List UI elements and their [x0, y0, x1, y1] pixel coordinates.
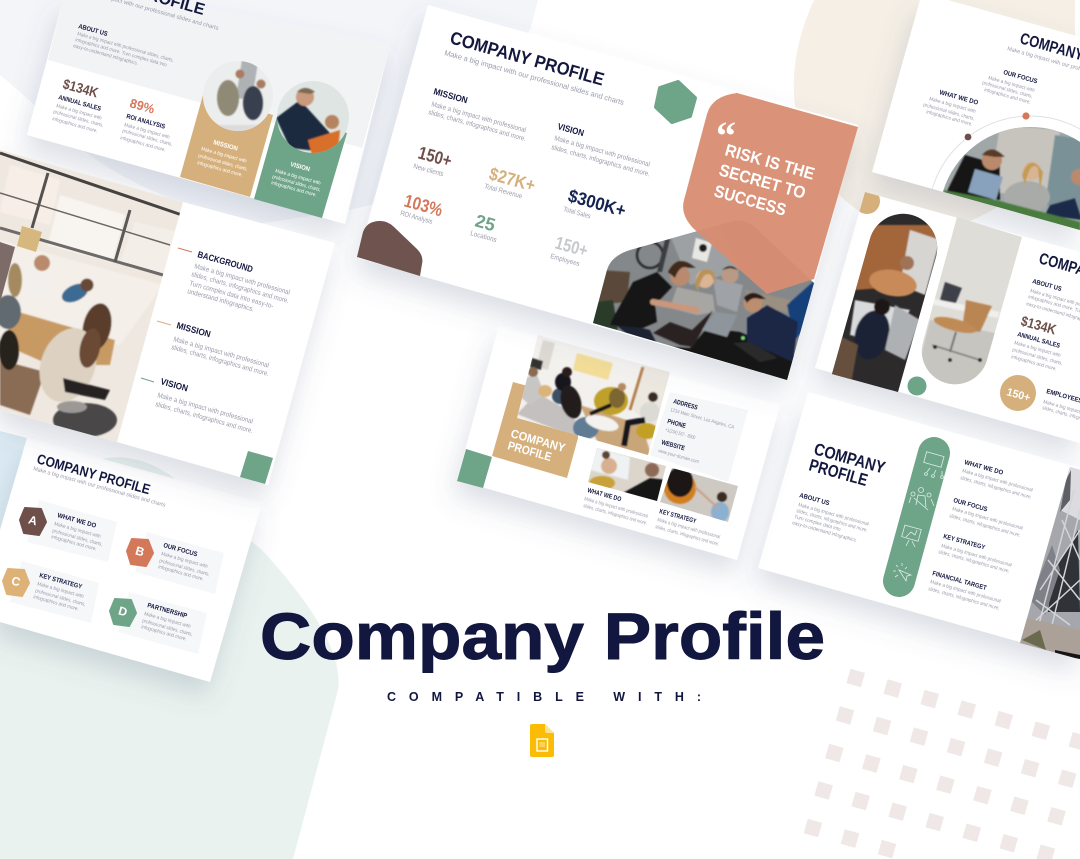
- hexagon A: [20, 508, 46, 535]
- vision heading: VISION: [556, 121, 585, 138]
- text: infographics and more.: [157, 564, 204, 583]
- about us text: easy-to-understand infographics.: [791, 520, 858, 544]
- key strategy heading: KEY STRATEGY: [942, 533, 986, 552]
- left brown block: [0, 242, 15, 303]
- annual sales text: Make a big impact with: [55, 103, 103, 122]
- vision heading: VISION: [159, 376, 189, 393]
- what we do text: Make a big impact with professional: [961, 468, 1033, 494]
- text: [50, 521, 103, 553]
- text: Make a big impact with: [53, 521, 102, 540]
- stat: roi: 89%: [128, 95, 157, 117]
- letter D: D: [117, 604, 129, 619]
- stat: employees: Employees: [549, 253, 581, 268]
- key strategy text: Make a big impact with professional: [940, 543, 1012, 569]
- green square: [240, 451, 273, 484]
- green octagon: [656, 82, 695, 122]
- icon: google slides: [530, 724, 554, 757]
- heading line one: COMPANY: [812, 440, 888, 478]
- vision text: [270, 168, 322, 199]
- building photo: [1020, 467, 1080, 659]
- vision text: slides, charts, infographics and more.: [550, 144, 651, 178]
- tan block heading: COMPANY: [509, 426, 567, 455]
- quote text: [712, 141, 817, 220]
- what we do text: Make a big impact with professional: [583, 496, 649, 520]
- text: [140, 611, 193, 643]
- brown blob: [357, 221, 422, 276]
- photo: hair stylist: [660, 468, 738, 522]
- quote text: SUCCESS: [712, 182, 788, 220]
- heading: WHAT WE DO: [56, 512, 97, 530]
- letter B: B: [134, 544, 146, 559]
- what we do text: slides, charts, infographics and more.: [582, 503, 648, 527]
- about us text: slides, charts, infographics and more.: [795, 508, 868, 534]
- icon: folder network: [924, 452, 944, 478]
- green dot: [908, 376, 926, 396]
- address heading: ADDRESS: [672, 398, 699, 412]
- annual sales text: infographics and more.: [51, 116, 98, 135]
- brown dot: [965, 134, 971, 140]
- text: Make a big impact with: [160, 551, 209, 570]
- heading: PARTNERSHIP: [146, 602, 188, 620]
- background: beige shape: [794, 0, 1075, 221]
- mission text: [196, 146, 248, 179]
- about us text: [791, 502, 869, 544]
- slide: main company profile: [357, 5, 858, 385]
- card D: [110, 592, 207, 654]
- mission panel: [180, 95, 273, 197]
- phone: +1(234) 567 - 8900: [664, 427, 696, 441]
- subtitle: Make a big impact with our professional slides and charts: [443, 48, 625, 107]
- vision text: Make a big impact with professional: [553, 135, 651, 169]
- key strategy text: slides, charts, infographics and more.: [654, 524, 720, 548]
- accent line: background: [178, 248, 192, 252]
- arch photo: office chair: [922, 218, 1022, 384]
- stat: total revenue: Total Revenue: [483, 183, 523, 200]
- about us text: Turn complex data into: [793, 514, 841, 533]
- about us text: Make a big impact with professional slides, charts,: [76, 31, 174, 64]
- photo: woman in profile: [588, 448, 666, 501]
- roi heading: ROI ANALYSIS: [125, 113, 166, 131]
- stat: new clients: 150+: [416, 143, 454, 171]
- annual sales text: Make a big impact with: [1013, 340, 1062, 359]
- our focus heading: OUR FOCUS: [1002, 69, 1039, 85]
- grey contact panel: [650, 392, 748, 482]
- mission heading: MISSION: [175, 320, 212, 339]
- quote mark: “: [716, 113, 736, 158]
- key strategy text: slides, charts, infographics and more.: [937, 549, 1010, 575]
- what we do heading: WHAT WE DO: [963, 459, 1004, 477]
- what we do text: Make a big impact with: [928, 96, 977, 115]
- slide card: [0, 150, 335, 485]
- text: infographics and more.: [50, 534, 97, 553]
- background heading: BACKGROUND: [196, 249, 254, 274]
- quote panel: [683, 93, 858, 294]
- annual sales text: [1010, 340, 1063, 373]
- about us text: infographics and more. Turn complex data into: [74, 37, 168, 69]
- tan square: [17, 226, 42, 252]
- vision panel: [254, 113, 347, 218]
- what we do text: professional slides, charts,: [922, 102, 975, 122]
- financial target text: Make a big impact with professional: [929, 579, 1001, 605]
- background text: understand infographics.: [186, 288, 255, 313]
- heading: KEY STRATEGY: [38, 572, 83, 591]
- address: 1234 Main Street, Los Angeles, CA: [669, 407, 735, 431]
- about us text: easy-to-understand infographics.: [72, 43, 139, 67]
- financial target heading: FINANCIAL TARGET: [931, 570, 987, 592]
- mission heading: MISSION: [212, 139, 239, 153]
- stat: new clients: [412, 143, 454, 178]
- slide card: [358, 5, 858, 380]
- about us text: Make a big impact with professional: [797, 502, 869, 528]
- slide card: [27, 0, 390, 224]
- our focus text: Make a big impact with: [987, 75, 1036, 94]
- our focus text: professional slides, charts,: [981, 80, 1033, 100]
- grey header panel: [48, 0, 390, 148]
- what we do text: [922, 96, 977, 128]
- icon: click cursor: [893, 563, 911, 581]
- mission text: slides, charts, infographics and more.: [427, 109, 527, 143]
- green square: [457, 449, 492, 488]
- vision photo: [277, 81, 349, 153]
- annual sales text: professional slides, charts,: [52, 109, 104, 129]
- mission heading: MISSION: [432, 86, 469, 105]
- stat: employees: 150+: [553, 233, 590, 261]
- mission text: infographics and more.: [196, 160, 243, 179]
- green pill: [899, 453, 934, 581]
- employees badge: [1000, 375, 1036, 411]
- about us heading: ABOUT US: [1031, 278, 1063, 293]
- background text: [186, 263, 291, 313]
- letter A: A: [27, 513, 39, 528]
- tan block: [492, 382, 578, 478]
- what we do heading: WHAT WE DO: [938, 89, 979, 107]
- sky photo strip left of lower slide: [0, 431, 27, 532]
- text: Make a big impact with: [143, 611, 192, 630]
- slide card: [872, 0, 1080, 230]
- stat: total sales: Total Sales: [562, 206, 592, 221]
- annual sales text: [51, 103, 104, 135]
- website heading: WEBSITE: [660, 439, 686, 453]
- text: infographics and more.: [32, 594, 79, 613]
- vision text: professional slides, charts,: [271, 174, 321, 193]
- annual sales text: professional slides, charts,: [1011, 347, 1063, 367]
- employees badge: 150+: [1005, 386, 1032, 404]
- key strategy heading: KEY STRATEGY: [658, 508, 697, 525]
- mission photo: [203, 61, 268, 131]
- card C: [3, 561, 99, 623]
- heading line two: PROFILE: [807, 456, 870, 490]
- meeting photo: [517, 335, 670, 455]
- text: infographics and more.: [140, 624, 187, 643]
- dot pattern: [804, 669, 1080, 859]
- text: Make a big impact with: [36, 581, 85, 600]
- card A: [20, 500, 117, 562]
- hexagon C: [3, 569, 29, 596]
- what we do heading: WHAT WE DO: [586, 487, 622, 503]
- vision text: Make a big impact with: [274, 168, 322, 187]
- slide: about us top left: [27, 0, 390, 224]
- slide card: [758, 392, 1080, 659]
- annual sales heading: ANNUAL SALES: [57, 94, 102, 113]
- stat: total sales: $300K+: [566, 186, 628, 221]
- annual sales text: infographics and more.: [1010, 354, 1057, 373]
- slide card: [457, 325, 780, 560]
- mission text: Make a big impact with professional: [172, 336, 270, 370]
- stat: locations: 25: [473, 211, 498, 235]
- card B: [127, 532, 224, 594]
- stat: locations: Locations: [469, 230, 498, 244]
- quote text: RISK IS THE: [723, 141, 817, 184]
- hexagon D: [110, 599, 136, 626]
- what we do text: slides, charts, infographics and more.: [959, 475, 1032, 501]
- our focus heading: OUR FOCUS: [952, 497, 989, 513]
- background text: Make a big impact with professional: [193, 263, 291, 297]
- subtitle: Make a big impact with our professional slides and charts: [32, 466, 166, 509]
- background: mint shape: [0, 450, 339, 859]
- what we do text: infographics and more.: [925, 109, 973, 128]
- website: www.your-domain.com: [657, 448, 700, 465]
- phone heading: PHONE: [666, 418, 687, 430]
- slide: what we do top right: [864, 0, 1080, 248]
- text: professional slides, charts,: [141, 618, 193, 638]
- text: professional slides, charts,: [158, 558, 210, 578]
- financial target text: slides, charts, infographics and more.: [927, 586, 1000, 612]
- annual sales heading: ANNUAL SALES: [1016, 331, 1061, 350]
- team photo half circle: [942, 127, 1080, 230]
- main title: Company Profile: [260, 599, 825, 673]
- stat: locations: [469, 211, 498, 244]
- vision heading: VISION: [289, 161, 311, 173]
- vision text: infographics and more.: [270, 180, 317, 199]
- slide card: [0, 438, 262, 682]
- roi text: Make a big impact with: [123, 122, 171, 141]
- hexagon B: [127, 539, 153, 566]
- vision text: slides, charts, infographics and more.: [154, 401, 254, 435]
- quote text: SECRET TO: [717, 161, 808, 203]
- slide: icons pill bottom right: [758, 392, 1080, 665]
- mission text: professional slides, charts,: [197, 153, 248, 173]
- stat: total revenue: $27K+: [487, 164, 538, 195]
- mission text: Make a big impact with professional: [430, 101, 527, 134]
- stat: employees: [549, 233, 590, 268]
- accent line: vision: [141, 378, 154, 382]
- office meeting photo: [0, 140, 190, 450]
- icon: presentation board: [902, 525, 921, 547]
- text: [157, 551, 210, 583]
- roi text: professional slides, charts,: [121, 128, 173, 148]
- background: pale blue shape: [0, 0, 538, 225]
- accent line: mission: [157, 321, 171, 325]
- slide: contact center: [457, 325, 780, 560]
- vision text: Make a big impact with professional: [156, 392, 254, 426]
- stat: annual sales: $134K: [61, 75, 100, 101]
- icon: team: [909, 488, 934, 510]
- background text: slides, charts, infographics and more.: [190, 271, 290, 305]
- heading: COMPANY PROFILE: [35, 450, 152, 497]
- mission text: Make a big impact with: [200, 146, 248, 165]
- stat: new clients: New clients: [412, 163, 445, 178]
- slide: background mission vision left: [0, 140, 335, 485]
- about us heading: ABOUT US: [798, 492, 831, 507]
- letter C: C: [10, 574, 22, 589]
- mission text: slides, charts, infographics and more.: [170, 344, 270, 378]
- about us heading: ABOUT US: [77, 23, 109, 38]
- slide: about us right with arch photos: [815, 188, 1080, 443]
- slide card: [815, 192, 1080, 443]
- heading: COMPANY PROFILE: [448, 28, 606, 90]
- tan block heading: PROFILE: [506, 438, 553, 464]
- text: professional slides, charts,: [51, 528, 103, 548]
- salmon dot: [1022, 112, 1030, 120]
- arch photo: office workers: [832, 214, 938, 392]
- our focus text: Make a big impact with professional: [951, 506, 1023, 532]
- team photo: [593, 231, 814, 380]
- stat: roi analysis: ROI Analysis: [399, 210, 434, 226]
- slide: four strategies bottom left: [0, 438, 262, 682]
- our focus text: [981, 75, 1036, 106]
- heading: OUR FOCUS: [162, 542, 199, 558]
- tan corner circle: [860, 192, 880, 214]
- roi text: infographics and more.: [119, 135, 166, 154]
- stat: annual sales: $134K: [1019, 312, 1058, 338]
- our focus text: infographics and more.: [983, 87, 1031, 106]
- orbit arc: [932, 116, 1080, 189]
- text: professional slides, charts,: [34, 588, 86, 608]
- background text: Turn complex data into easy-to-: [188, 280, 275, 310]
- compatible with label: COMPATIBLE WITH:: [387, 690, 701, 704]
- stat: roi analysis: 103%: [402, 191, 445, 220]
- our focus text: slides, charts, infographics and more.: [948, 513, 1021, 539]
- roi text: [119, 122, 173, 154]
- key strategy text: Make a big impact with professional: [656, 517, 721, 540]
- text: [32, 581, 86, 613]
